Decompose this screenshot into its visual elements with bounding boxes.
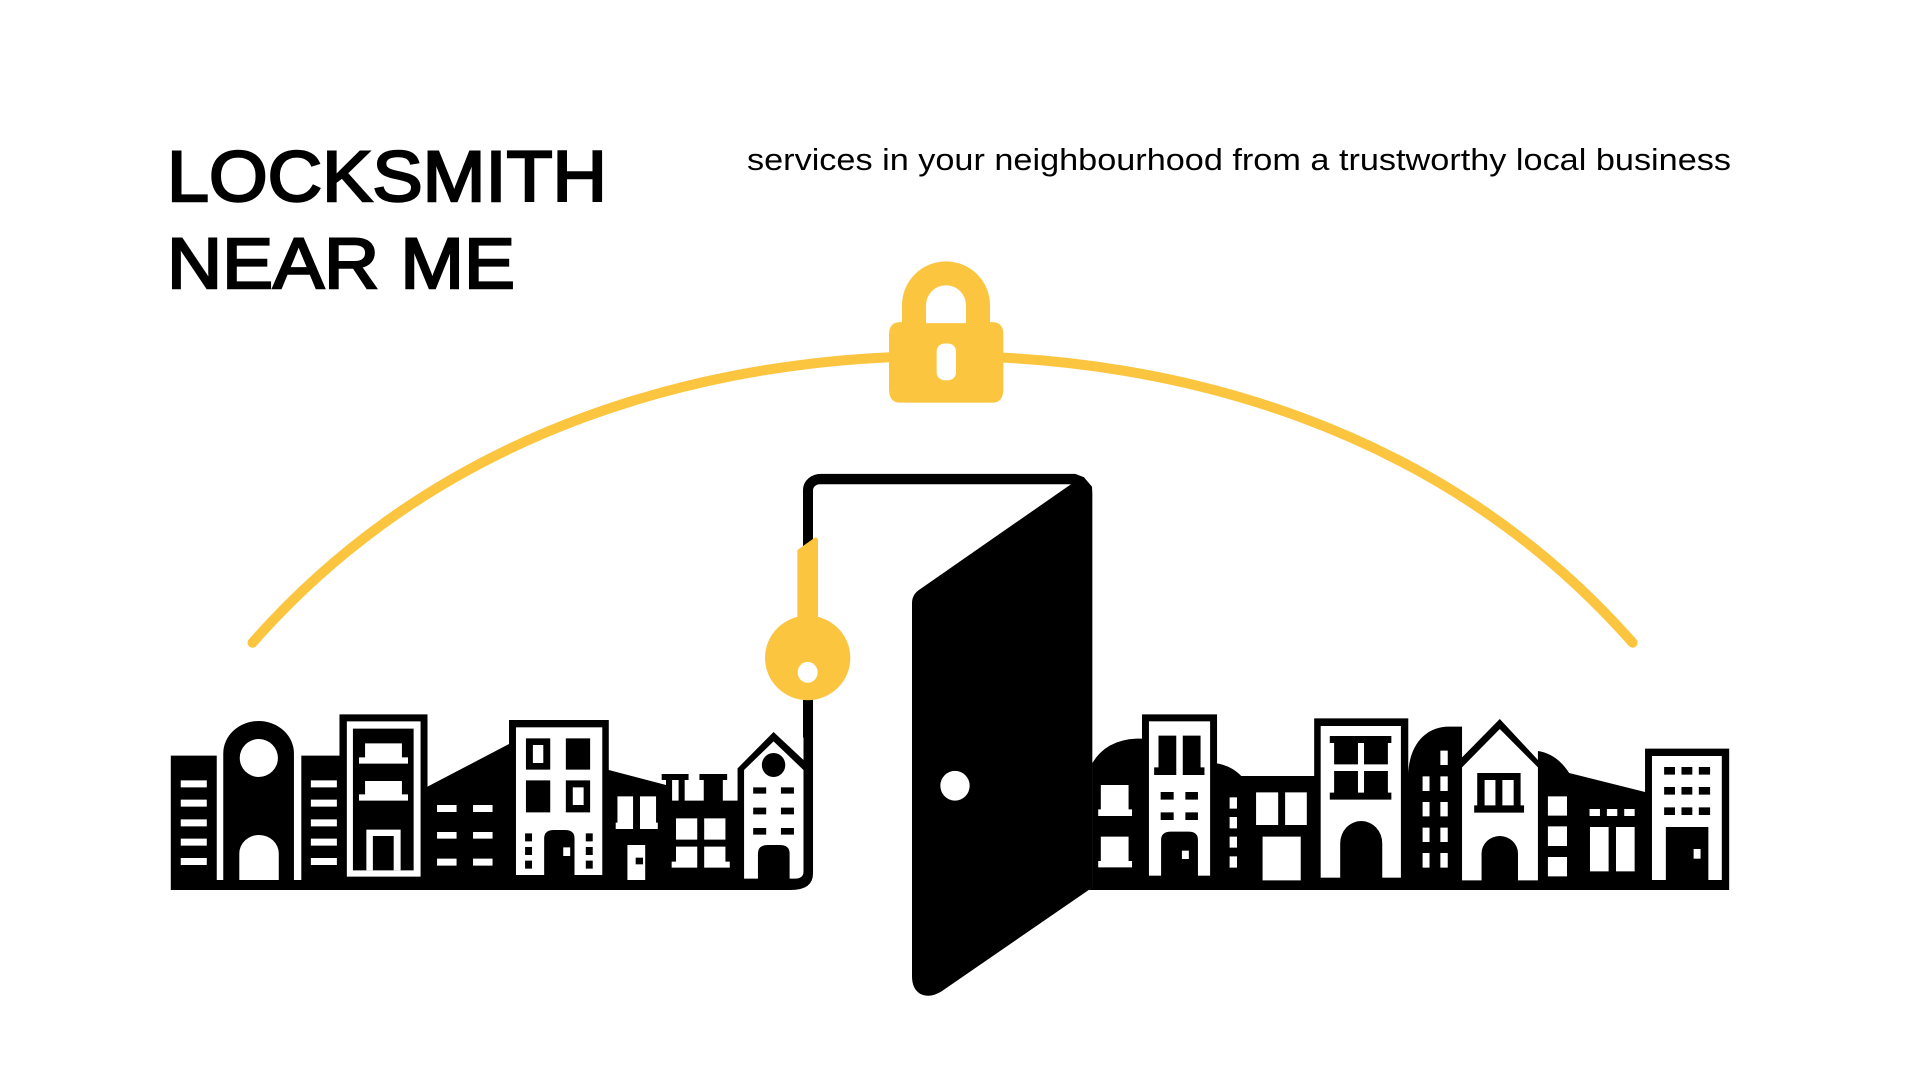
right office block <box>1652 756 1722 881</box>
low shop windows <box>1230 792 1307 880</box>
low building windows <box>437 805 493 866</box>
arched tower with wings <box>181 739 337 880</box>
open door <box>912 474 1092 996</box>
icon: padlock <box>889 261 1003 403</box>
gabled house <box>1462 729 1538 881</box>
dome tower windows <box>1423 751 1448 868</box>
left skyline silhouette <box>171 700 813 890</box>
title: LOCKSMITH <box>167 138 607 217</box>
left skyline <box>171 700 813 890</box>
door frame <box>803 474 1075 738</box>
icon: key <box>765 537 850 700</box>
door knob <box>940 771 970 801</box>
subtitle: services in your neighbourhood from a trustworthy local business <box>747 142 1731 177</box>
sloped building windows <box>1548 796 1635 876</box>
title: NEAR ME <box>167 225 515 304</box>
right skyline silhouette <box>1089 714 1729 890</box>
domed building windows <box>1098 785 1132 867</box>
right skyline <box>1089 714 1729 890</box>
white apartment block <box>516 727 602 877</box>
narrow tower <box>1149 721 1210 877</box>
title <box>167 138 607 304</box>
framed tower <box>347 721 421 877</box>
small house windows and door <box>616 796 658 880</box>
chimney building windows <box>672 780 730 868</box>
protective arc <box>252 356 1633 643</box>
gabled house <box>744 741 803 880</box>
white townhouse <box>1321 726 1401 879</box>
